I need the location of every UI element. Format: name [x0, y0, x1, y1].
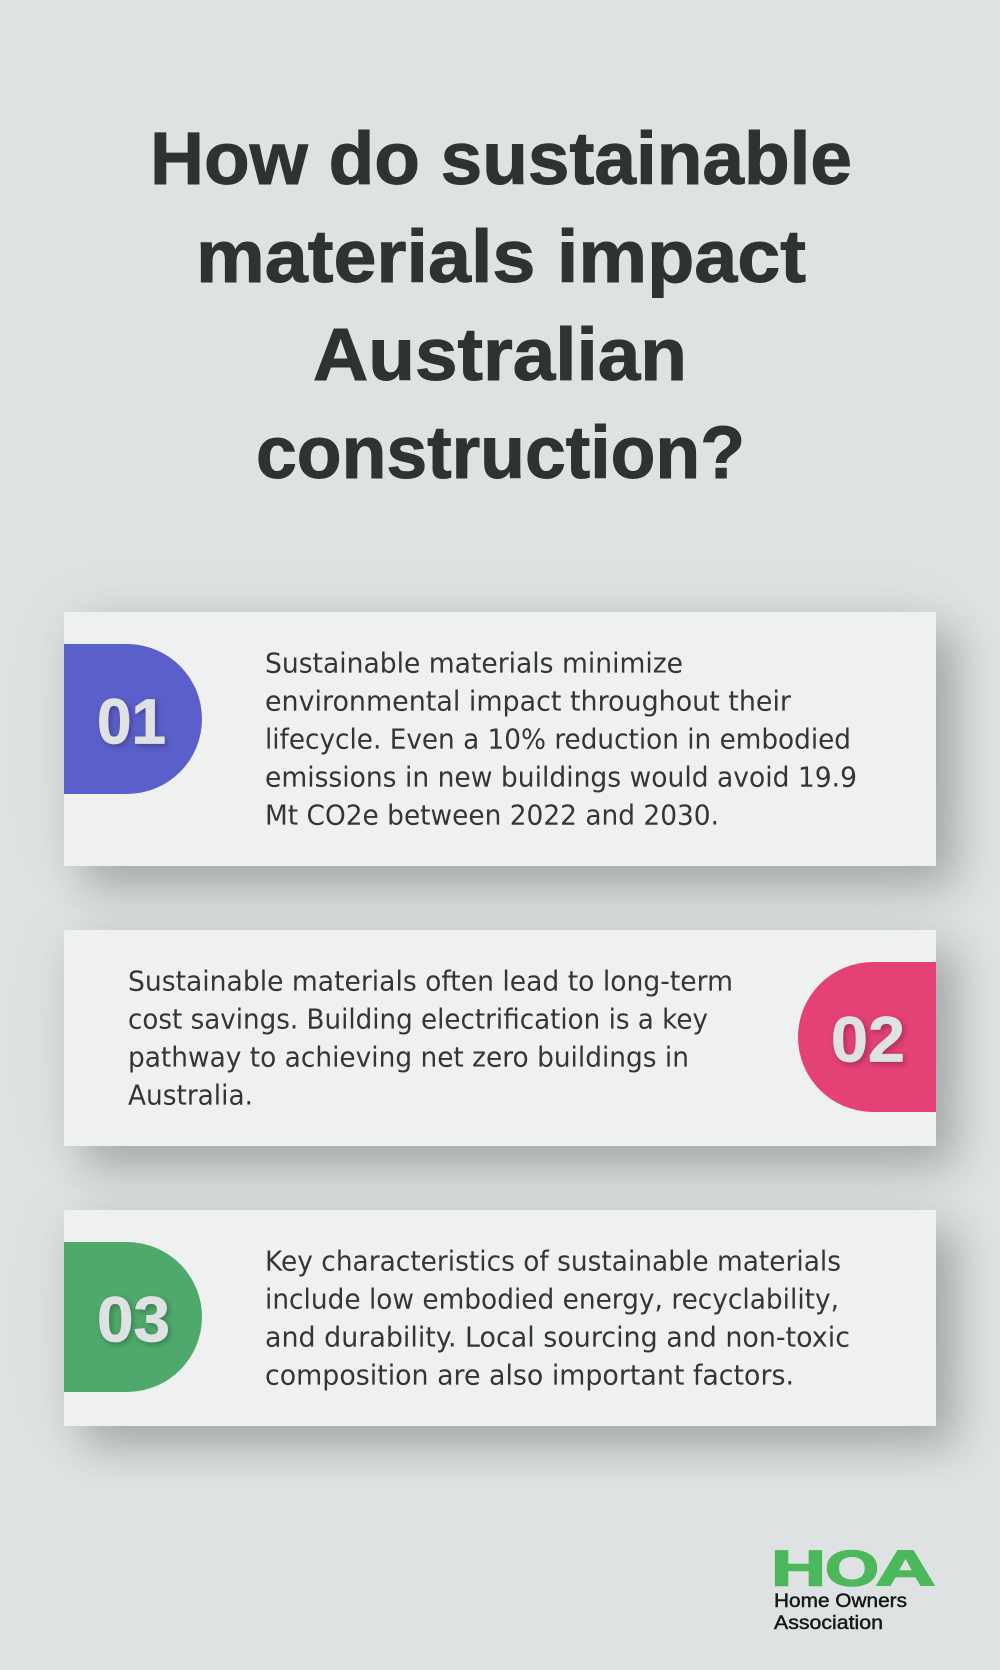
panel: card 02 [64, 930, 936, 1146]
text block: card 02: Sustainable materials often lead to long-term [128, 966, 733, 998]
title [150, 117, 852, 494]
text block: card 01: emissions in new buildings would avoid 19.9 [265, 762, 857, 794]
panel: card 01 [64, 612, 936, 866]
text block: card 03: include low embodied energy, recyclability, [265, 1284, 839, 1316]
logo: Home Owners Association: Association [774, 1612, 883, 1634]
badge: 02: 02 [831, 1004, 905, 1076]
text block: card 02 [128, 966, 733, 1112]
title: How do sustainable [150, 117, 852, 200]
badge: 01: 01 [97, 686, 166, 758]
text block: card 01: Sustainable materials minimize [265, 648, 683, 680]
text block: card 02: cost savings. Building electrification is a key [128, 1004, 708, 1036]
badge: 03: 03 [97, 1284, 170, 1356]
text block: card 03 [265, 1246, 850, 1392]
title: Australian [313, 313, 687, 396]
title: materials impact [196, 215, 806, 298]
logo: Home Owners Association: H [771, 1540, 826, 1596]
logo: Home Owners Association: O [825, 1540, 879, 1596]
text block: card 01 [265, 648, 857, 832]
logo: Home Owners Association [771, 1540, 936, 1634]
logo: Home Owners Association: Home Owners [774, 1590, 907, 1612]
badge: 01 [64, 644, 202, 794]
title: construction? [256, 411, 745, 494]
badge: 03 [64, 1242, 202, 1392]
text block: card 03: and durability. Local sourcing and non-toxic [265, 1322, 850, 1354]
text block: card 03: composition are also important factors. [265, 1360, 794, 1392]
text block: card 01: Mt CO2e between 2022 and 2030. [265, 800, 719, 832]
text block: card 02: pathway to achieving net zero buildings in [128, 1042, 689, 1074]
panel: card 03 [64, 1210, 936, 1426]
text block: card 02: Australia. [128, 1080, 253, 1112]
text block: card 01: environmental impact throughout their [265, 686, 792, 718]
logo: Home Owners Association: A [876, 1540, 936, 1596]
badge: 02 [798, 962, 936, 1112]
text block: card 03: Key characteristics of sustainable materials [265, 1246, 841, 1278]
text block: card 01: lifecycle. Even a 10% reduction in embodied [265, 724, 851, 756]
